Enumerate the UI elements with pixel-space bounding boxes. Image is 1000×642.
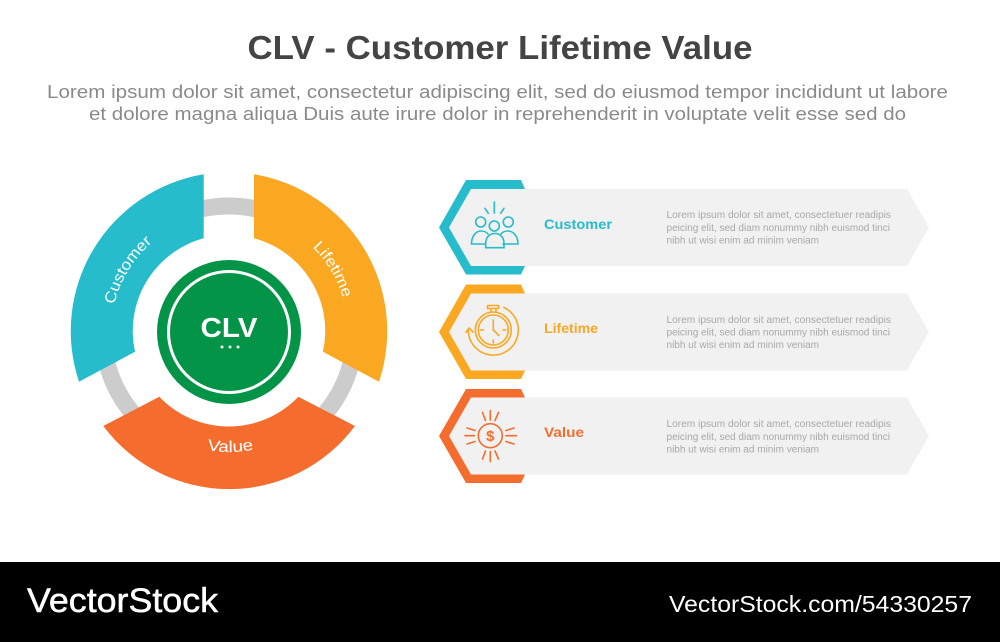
description text: nibh ut wisi enim ad minim veniam [666, 444, 819, 456]
description text: peicing elit, sed diam nonummy nibh euismod tinci [666, 223, 890, 234]
row background arrow [449, 294, 929, 370]
segment: Lifetime [254, 174, 388, 382]
footer banner [0, 562, 1000, 642]
description text: peicing elit, sed diam nonummy nibh euismod tinci [666, 432, 890, 443]
hexagon frame [439, 180, 525, 274]
footer logo text: VectorStock [27, 582, 219, 620]
row: Lifetime [439, 284, 929, 379]
row background arrow [449, 398, 929, 474]
description text: Lorem ipsum dolor sit amet, consectetuer readipis [666, 210, 891, 221]
title: CLV - Customer Lifetime Value [248, 29, 752, 66]
row background arrow [449, 189, 929, 266]
icon: people [472, 202, 518, 248]
row: Value [439, 389, 929, 483]
description text: nibh ut wisi enim ad minim veniam [666, 340, 819, 351]
label: Customer: Customer [544, 217, 613, 232]
circular diagram [70, 174, 388, 490]
description text: Lorem ipsum dolor sit amet, consectetuer readipis [666, 315, 891, 326]
description text [666, 315, 891, 351]
icon: dollar coin: $ [486, 428, 495, 445]
icon: stopwatch [466, 306, 518, 355]
description text: Lorem ipsum dolor sit amet, consectetuer readipis [666, 419, 891, 430]
label: Value: Value [544, 425, 585, 440]
row: Customer [439, 180, 929, 274]
segment: Customer: Customer [105, 236, 150, 302]
segment: Value [103, 396, 355, 490]
subtitle text: Lorem ipsum dolor sit amet, consectetur adipiscing elit, sed do eiusmod tempor incididunt ut labore [47, 82, 948, 102]
description text [666, 419, 891, 456]
description text: nibh ut wisi enim ad minim veniam [666, 236, 819, 246]
description text: peicing elit, sed diam nonummy nibh euismod tinci [666, 328, 890, 338]
segment: Customer [70, 174, 204, 382]
segment: Lifetime: Lifetime [314, 240, 350, 296]
center badge: CLV: CLV [200, 312, 258, 343]
hexagon frame [439, 389, 525, 483]
footer url text: VectorStock.com/54330257 [669, 591, 972, 617]
center badge: CLV [157, 260, 301, 404]
subtitle text [47, 82, 948, 124]
segment: Value: Value [208, 439, 252, 452]
hexagon frame [439, 284, 525, 379]
description text [666, 210, 891, 246]
icon: dollar coin [465, 410, 516, 462]
subtitle text: et dolore magna aliqua Duis aute irure dolor in reprehenderit in voluptate velit esse sed do [89, 104, 906, 124]
label: Lifetime: Lifetime [544, 321, 599, 336]
grey background ring [103, 206, 355, 458]
